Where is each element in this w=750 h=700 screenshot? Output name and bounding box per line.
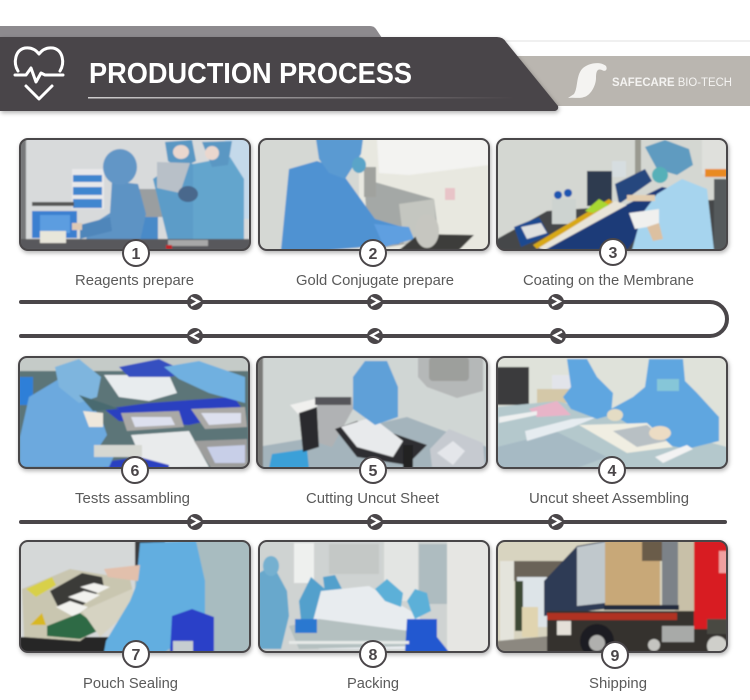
panel: step 2 gold conjugate prepare: [259, 139, 489, 289]
step number 8: 8: [369, 647, 378, 664]
arrow: [187, 328, 203, 344]
step number 8: [360, 641, 386, 667]
arrow: [548, 294, 564, 310]
step number 2: [360, 240, 386, 266]
panel: step 7 pouch sealing: [20, 541, 250, 692]
connector: upper loop with arrows: [21, 294, 727, 344]
step number 5: [360, 457, 386, 483]
logo text: SAFECARE BIO-TECH: [612, 77, 732, 89]
label: Tests assambling: [75, 491, 190, 507]
label: Shipping: [589, 676, 647, 692]
step number 4: 4: [608, 463, 617, 480]
logo strip: [515, 56, 750, 106]
back tab: [0, 26, 382, 38]
connector: lower line with arrows: [21, 514, 725, 530]
arrow: [548, 514, 564, 530]
step number 3: 3: [609, 245, 618, 262]
label: Gold Conjugate prepare: [296, 273, 454, 289]
icon: heart with pulse: [15, 48, 63, 99]
label: Cutting Uncut Sheet: [306, 491, 439, 507]
step number 9: 9: [611, 648, 620, 665]
label: Uncut sheet Assembling: [529, 491, 689, 507]
step number 1: 1: [132, 246, 141, 263]
step number 9: [602, 642, 628, 668]
arrow: [550, 328, 566, 344]
step number 6: [122, 457, 148, 483]
step number 7: 7: [132, 647, 141, 664]
arrow: [187, 514, 203, 530]
step number 7: [123, 641, 149, 667]
panel: step 3 coating on the membrane: [497, 139, 727, 289]
label: Packing: [347, 676, 399, 692]
arrow: [367, 294, 383, 310]
step number 5: 5: [369, 463, 378, 480]
panel: step 4 uncut sheet assembling: [497, 357, 727, 507]
arrow: [367, 328, 383, 344]
label: Reagents prepare: [75, 273, 194, 289]
arrow: [187, 294, 203, 310]
panel: step 5 cutting uncut sheet: [257, 357, 487, 507]
main banner shape: [0, 37, 558, 111]
title: PRODUCTION PROCESS: [89, 58, 412, 90]
panel: step 9 shipping: [497, 541, 727, 692]
step number 1: [123, 240, 149, 266]
panel: step 1 reagents prepare: [20, 139, 250, 289]
step number 3: [600, 239, 626, 265]
panel: step 6 tests assambling: [19, 357, 249, 507]
step number 6: 6: [131, 463, 140, 480]
header banner: [0, 26, 750, 111]
step number 2: 2: [369, 246, 378, 263]
panel: step 8 packing: [259, 541, 489, 692]
step number 4: [599, 457, 625, 483]
label: Pouch Sealing: [83, 676, 178, 692]
arrow: [367, 514, 383, 530]
logo mark: [568, 63, 607, 98]
label: Coating on the Membrane: [523, 273, 694, 289]
